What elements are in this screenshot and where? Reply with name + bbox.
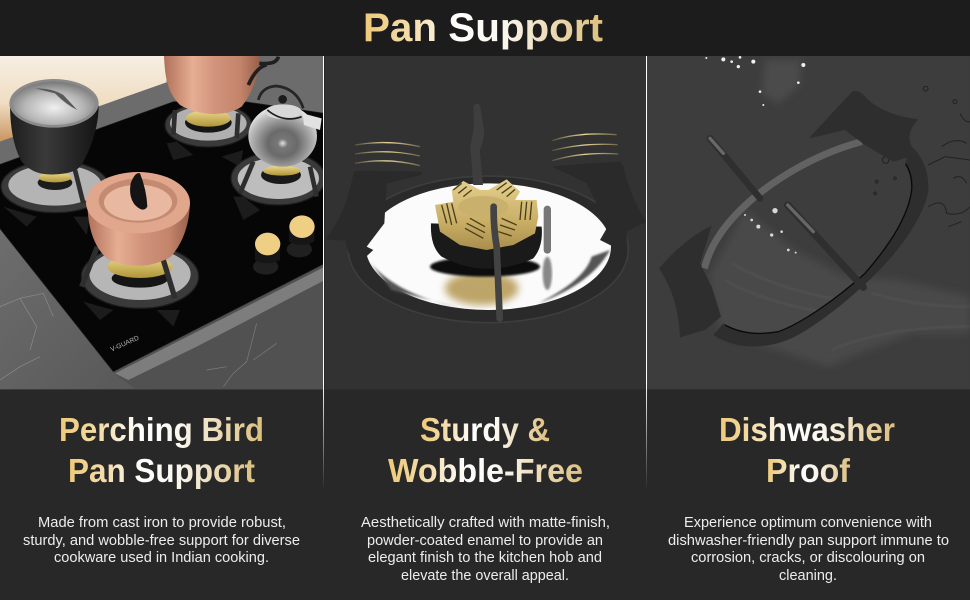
- support arm: left: [328, 171, 416, 256]
- heading: dishwasher: [719, 411, 895, 489]
- finger: lower: [788, 205, 863, 287]
- column divider right: [646, 56, 647, 490]
- text: sturdy: [361, 515, 610, 584]
- water: dark droplets: [874, 86, 970, 227]
- front finger and ignition pin: [494, 207, 547, 318]
- title: Pan Support: [363, 6, 603, 50]
- heading: sturdy: [388, 411, 583, 489]
- heading: dishwasher: Dishwasher: [719, 411, 895, 448]
- photo: dishwasher proof pan support: [645, 56, 970, 390]
- water: top splash: [705, 56, 805, 106]
- text: dishwasher: dishwasher-friendly pan support immune to: [668, 533, 949, 549]
- text: dishwasher: [668, 515, 949, 584]
- arm: top right: [809, 91, 918, 162]
- photo: hob with cookware: [0, 50, 326, 390]
- control knobs: [253, 215, 315, 275]
- text: sturdy: elevate the overall appeal.: [401, 568, 569, 584]
- motion lines: left: [355, 143, 420, 166]
- burner: right: [231, 152, 326, 205]
- burner: left: [1, 161, 109, 213]
- support ring: [348, 176, 628, 323]
- text: perching bird: Made from cast iron to provide robust,: [38, 515, 286, 531]
- text: sturdy: powder-coated enamel to provide an: [367, 533, 603, 549]
- ring: light inner arc: [704, 142, 862, 268]
- burner: front: [81, 245, 199, 308]
- heading: sturdy: Sturdy &: [420, 411, 550, 448]
- pot: black: [9, 79, 99, 174]
- text: perching bird: sturdy, and wobble-free support for diverse: [23, 533, 300, 549]
- text: dishwasher: Experience optimum convenience with: [684, 515, 932, 531]
- finger: upper: [710, 138, 760, 198]
- text: dishwasher: corrosion, cracks, or discolouring on: [691, 550, 925, 566]
- text: perching bird: [23, 515, 300, 566]
- burner: back: [165, 103, 252, 147]
- pot: back copper: [164, 56, 278, 114]
- hob glass: [0, 100, 325, 372]
- brand mark: V-GUARD: [110, 335, 140, 353]
- text: dishwasher: cleaning.: [779, 568, 837, 584]
- water: bottom wash: [708, 210, 970, 367]
- rear finger: [470, 104, 484, 185]
- heading: perching bird: [59, 411, 264, 489]
- text: sturdy: elegant finish to the kitchen hob and: [368, 550, 602, 566]
- text: sturdy: Aesthetically crafted with matte-finish,: [361, 515, 610, 531]
- heading: dishwasher: Proof: [766, 452, 851, 489]
- water: inner sparkle: [744, 208, 797, 254]
- motion lines: right: [552, 134, 618, 161]
- heading: perching bird: Perching Bird: [59, 411, 264, 448]
- support arm: right: [554, 162, 635, 246]
- heading: perching bird: Pan Support: [68, 452, 255, 489]
- photo: sturdy pan support with burner: [323, 56, 648, 390]
- title bar: [0, 0, 970, 56]
- heading: sturdy: Wobble-Free: [388, 452, 583, 489]
- arm: bottom left: [659, 226, 721, 337]
- pot: front copper: [86, 172, 190, 266]
- kettle: [248, 86, 322, 167]
- burner: [431, 179, 542, 269]
- text: perching bird: cookware used in Indian cooking.: [54, 550, 269, 566]
- steel plate: [366, 183, 611, 310]
- column divider left: [323, 56, 324, 490]
- ring: dark outer arc: [713, 147, 928, 346]
